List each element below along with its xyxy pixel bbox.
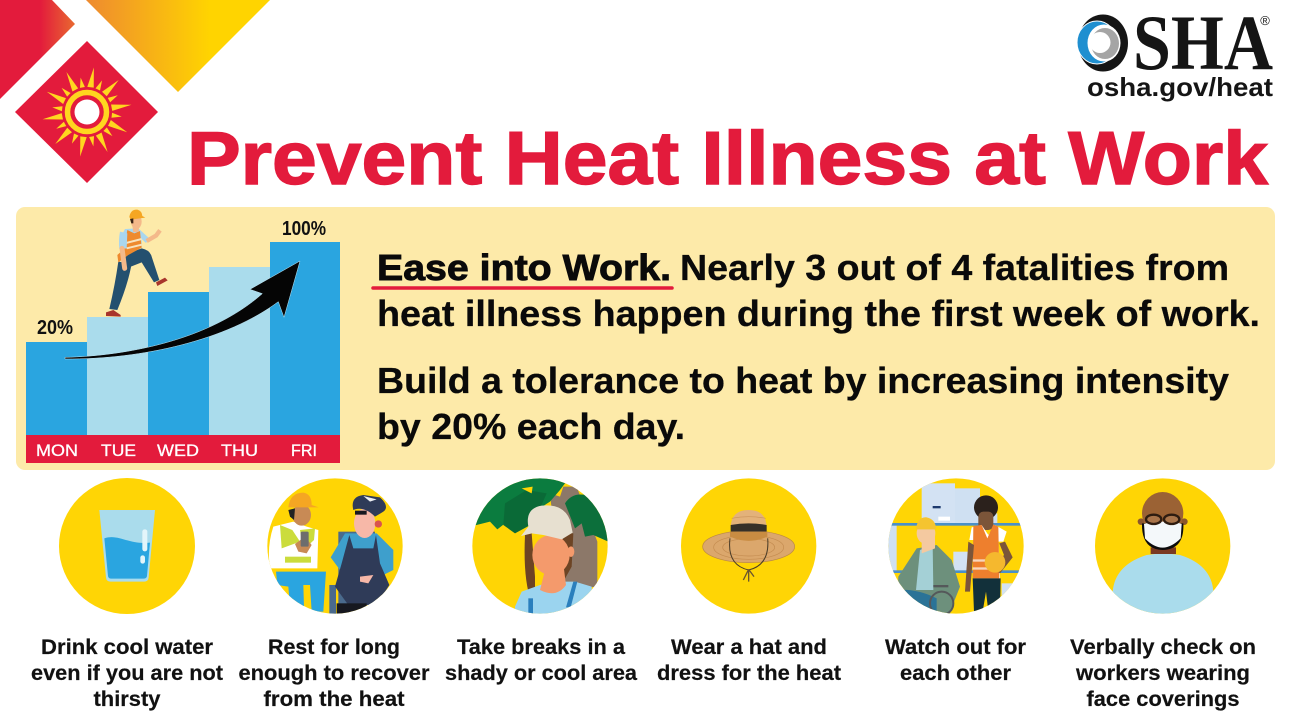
caption: take breaks: Take breaks in a [457,636,625,659]
caption: verbally check: workers wearing [1075,662,1250,685]
caption: rest [238,636,430,711]
day labels [36,441,317,460]
icon: resting workers [267,478,403,617]
caption: rest: from the heat [264,688,405,711]
text: ease into work [373,247,1260,447]
decorative corner: yellow gradient diamond [86,0,270,92]
day labels: MON [36,441,78,460]
caption: wear a hat [657,636,841,685]
panel: ease into work [16,207,1275,470]
label: 100%: 100% [282,218,326,240]
icon: shady tree break [470,473,610,617]
caption: watch out: Watch out for [885,636,1026,659]
caption: wear a hat: dress for the heat [657,662,841,685]
logo O mark [1077,14,1128,72]
day labels: WED [157,441,199,460]
arrow: rising intensity [65,261,300,359]
icon: glass of water [59,478,195,614]
title: Prevent Heat Illness at Work [187,116,1268,200]
caption: rest: enough to recover [238,662,430,685]
registered mark: ® [1260,13,1270,28]
body line 2: heat illness happen during the first week of work. [377,293,1260,334]
caption: take breaks [445,636,637,685]
body line 3: Build a tolerance to heat by increasing intensity [377,360,1229,401]
caption: drink cool water [31,636,223,711]
caption: drink cool water: Drink cool water [41,636,213,659]
day labels: TUE [101,441,136,460]
caption: verbally check: Verbally check on [1070,636,1256,659]
icon: worker stepping up [106,210,168,317]
caption: watch out: each other [900,662,1011,685]
caption: take breaks: shady or cool area [445,662,637,685]
caption: drink cool water: even if you are not [31,662,223,685]
day labels: FRI [291,441,317,460]
body line 1: Nearly 3 out of 4 fatalities from [680,247,1229,288]
caption: wear a hat: Wear a hat and [671,636,827,659]
icon: sun in red diamond [15,41,158,183]
day labels: THU [221,441,258,460]
logo: OSHA [1077,0,1273,102]
icon: straw hat [681,478,816,614]
caption: watch out [885,636,1026,685]
heading with underline: Ease into Work. [377,247,671,288]
caption: rest: Rest for long [268,636,400,659]
caption: verbally check [1070,636,1256,711]
caption: drink cool water: thirsty [94,688,161,711]
caption: verbally check: face coverings [1086,688,1240,711]
icon: person in face covering [1095,478,1230,617]
body line 4: by 20% each day. [377,406,685,447]
icon: coworkers watching out [888,478,1024,615]
decorative corner: red gradient diamond [0,0,75,99]
logo URL: osha.gov/heat [1087,72,1273,102]
bar chart: weekly intensity [26,218,340,463]
label: 20%: 20% [37,317,73,339]
